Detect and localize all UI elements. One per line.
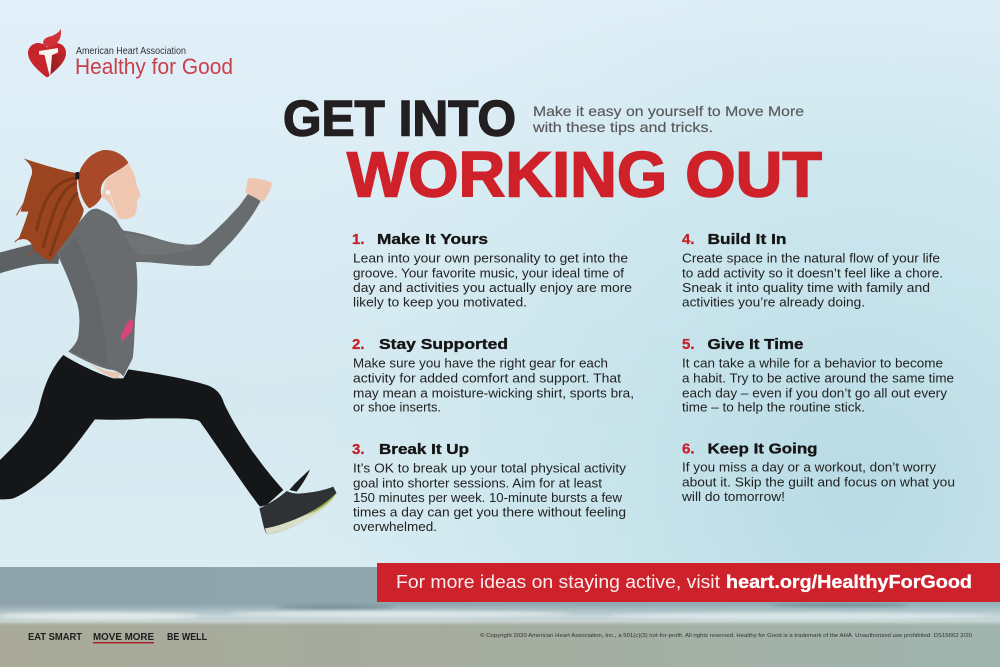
tip 3: Break It Up: times a day can get you there without feeling <box>353 506 626 520</box>
tip 1: Make It Yours: likely to keep you motivated. <box>353 296 527 310</box>
tip 6: Keep It Going <box>681 440 955 504</box>
footer navigation: MOVE MORE <box>93 632 154 643</box>
logo text: Healthy for Good: Healthy for Good <box>75 54 233 79</box>
logo: American Heart Association Healthy for Good <box>28 28 233 79</box>
tip 5: Give It Time <box>682 336 954 415</box>
tip 3: Break It Up: It’s OK to break up your total physical activity <box>353 462 627 476</box>
title: GET INTO: GET INTO <box>283 90 516 146</box>
subtitle <box>532 104 804 135</box>
tip 5: Give It Time: It can take a while for a behavior to become <box>682 357 943 371</box>
laces <box>289 469 310 492</box>
tip 6: Keep It Going: 6. <box>682 440 695 458</box>
tip 5: Give It Time: a habit. Try to be active around the same time <box>682 371 954 385</box>
tip 1: Make It Yours: Make It Yours <box>377 231 488 248</box>
callout banner: more ideas <box>377 563 1000 602</box>
subtitle: with these tips and tricks. <box>532 120 713 135</box>
runner photo cutout <box>0 150 337 534</box>
tip 4: Build It In: 4. <box>682 231 695 248</box>
tip 5: Give It Time: each day – even if you don’t go all out every <box>682 386 948 400</box>
tip 6: Keep It Going: about it. Skip the guilt and focus on what you <box>682 475 955 489</box>
tip 3: Break It Up: overwhelmed. <box>353 520 437 534</box>
tip 2: Stay Supported: Stay Supported <box>379 336 508 353</box>
tip 4: Build It In: to add activity so it doesn’t feel like a chore. <box>682 266 943 280</box>
tip 2: Stay Supported: 2. <box>352 336 365 353</box>
skin at waist <box>88 362 121 379</box>
tip 1: Make It Yours: Lean into your own personality to get into the <box>353 252 628 266</box>
tip 2: Stay Supported: or shoe inserts. <box>353 401 441 415</box>
tip 4: Build It In: Sneak it into quality time with family and <box>682 281 930 295</box>
tip 5: Give It Time: 5. <box>682 336 695 353</box>
footer navigation: BE WELL <box>167 632 207 643</box>
leggings <box>0 355 283 507</box>
callout banner: more ideas: heart.org/HealthyForGood <box>726 571 972 592</box>
tip 4: Build It In: Build It In <box>708 231 786 248</box>
footer navigation: EAT SMART <box>28 632 82 643</box>
subtitle: Make it easy on yourself to Move More <box>533 104 804 119</box>
tip 5: Give It Time: time – to help the routine stick. <box>682 401 865 415</box>
tip 2: Stay Supported: Make sure you have the right gear for each <box>353 357 608 371</box>
tip 1: Make It Yours: day and activities you actually enjoy are more <box>353 281 632 295</box>
tip 6: Keep It Going: Keep It Going <box>708 440 818 458</box>
tip 3: Break It Up: 150 minutes per week. 10-minute bursts a few <box>353 491 623 505</box>
tip 2: Stay Supported: activity for added comfort and support. That <box>353 371 622 385</box>
tip 4: Build It In <box>682 231 943 310</box>
tip 6: Keep It Going: If you miss a day or a workout, don’t worry <box>682 461 937 475</box>
tip 5: Give It Time: Give It Time <box>708 336 804 353</box>
tip 6: Keep It Going: will do tomorrow! <box>681 490 785 504</box>
tip 3: Break It Up: Break It Up <box>379 441 469 458</box>
footer navigation <box>28 632 207 644</box>
back arm <box>0 244 60 273</box>
shoe <box>259 487 337 534</box>
hair <box>15 150 128 262</box>
skin: face, neck and hand <box>102 163 141 219</box>
tip 4: Build It In: Create space in the natural flow of your life <box>682 252 940 266</box>
tip 3: Break It Up <box>352 441 627 534</box>
tip 3: Break It Up: goal into shorter sessions. Aim for at least <box>353 476 603 490</box>
tip 4: Build It In: activities you’re already doing. <box>682 296 865 310</box>
shirt <box>57 193 261 377</box>
logo text: American Heart Association: American Heart Association <box>76 46 186 57</box>
tip 3: Break It Up: 3. <box>352 441 365 458</box>
pink phone band <box>121 319 133 342</box>
icon: heart and torch <box>28 28 66 78</box>
tip 1: Make It Yours <box>352 231 632 310</box>
tip 2: Stay Supported: may mean a moisture-wicking shirt, sports bra, <box>353 386 634 400</box>
earbud <box>106 190 119 220</box>
tip 2: Stay Supported <box>352 336 634 415</box>
tip 1: Make It Yours: groove. Your favorite music, your ideal time of <box>353 266 625 280</box>
copyright notice: © Copyright 2020 American Heart Association, Inc., a 501(c)(3) not-for-profit. All rights reserved. Healthy for Good is a trademark of the AHA. Unauthorized use prohibited. DS15662 2/20 <box>480 632 972 639</box>
title: WORKING OUT: WORKING OUT <box>347 138 822 210</box>
tip 1: Make It Yours: 1. <box>352 231 365 248</box>
callout banner: more ideas: For more ideas on staying active, visit <box>396 571 720 592</box>
